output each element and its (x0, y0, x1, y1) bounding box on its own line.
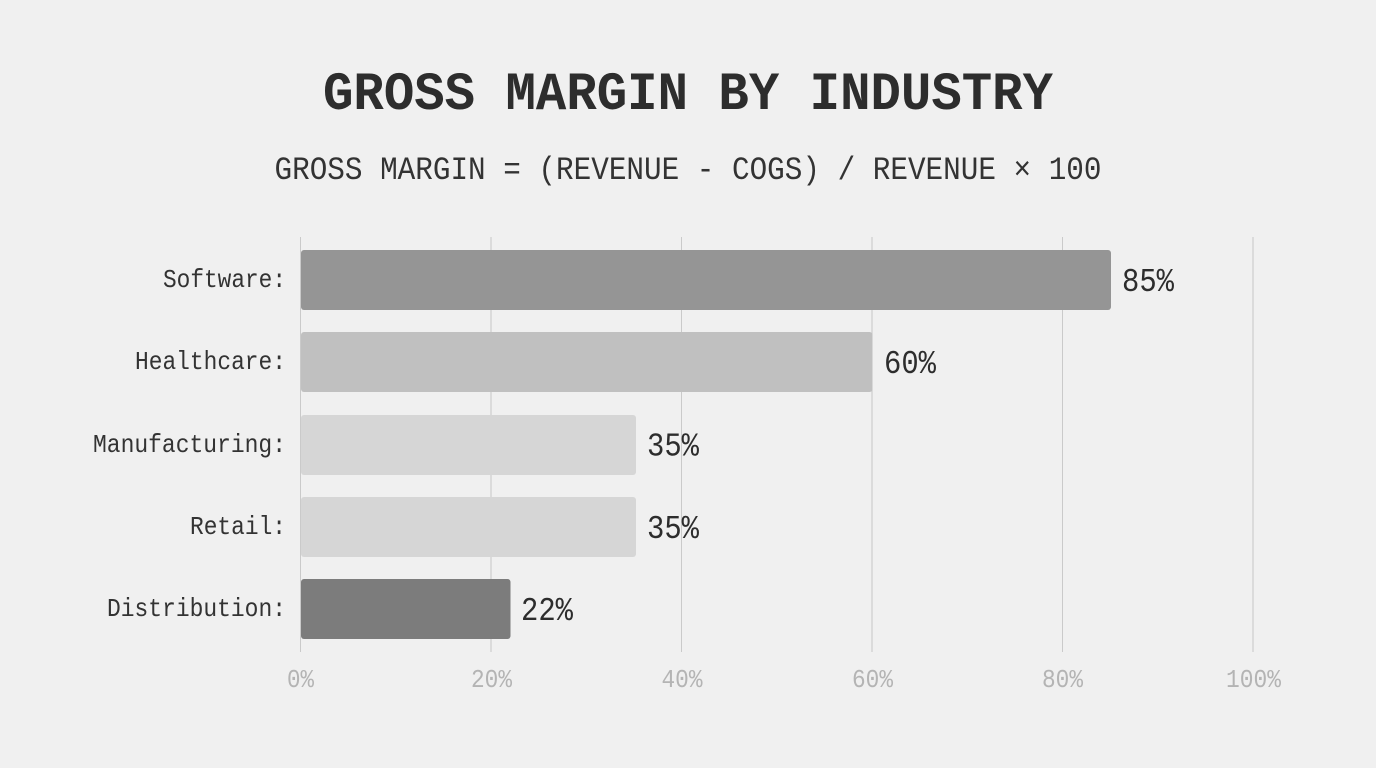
bar: Retail: Retail: (190, 512, 286, 542)
bar: Manufacturing: Manufacturing: (93, 430, 286, 460)
bar: Retail (190, 497, 699, 557)
bar: Distribution (107, 579, 573, 639)
x axis labels: 20% (471, 665, 512, 695)
x axis labels: 60% (852, 665, 893, 695)
x axis labels: 40% (662, 665, 703, 695)
bar: Manufacturing: 35% (647, 428, 699, 466)
bar: Healthcare: Healthcare: (135, 347, 286, 377)
bar: Software (163, 250, 1174, 310)
bar: Healthcare: 60% (884, 346, 936, 383)
x axis labels: 80% (1042, 665, 1083, 695)
bar: Software: 85% (1122, 264, 1174, 301)
bar chart (93, 237, 1281, 695)
title: GROSS MARGIN BY INDUSTRY (323, 65, 1054, 126)
bar: Healthcare (135, 332, 936, 392)
x axis labels (287, 665, 1281, 695)
subtitle formula: GROSS MARGIN = (REVENUE - COGS) / REVENUE × 100 (274, 152, 1102, 189)
x axis labels: 100% (1226, 665, 1281, 695)
bar: Retail: 35% (647, 511, 699, 548)
bar: Distribution: 22% (521, 593, 573, 630)
bar: Distribution: Distribution: (107, 594, 286, 624)
bar: Software: Software: (163, 265, 286, 295)
bar: Manufacturing (93, 415, 699, 475)
x axis labels: 0% (287, 665, 314, 695)
